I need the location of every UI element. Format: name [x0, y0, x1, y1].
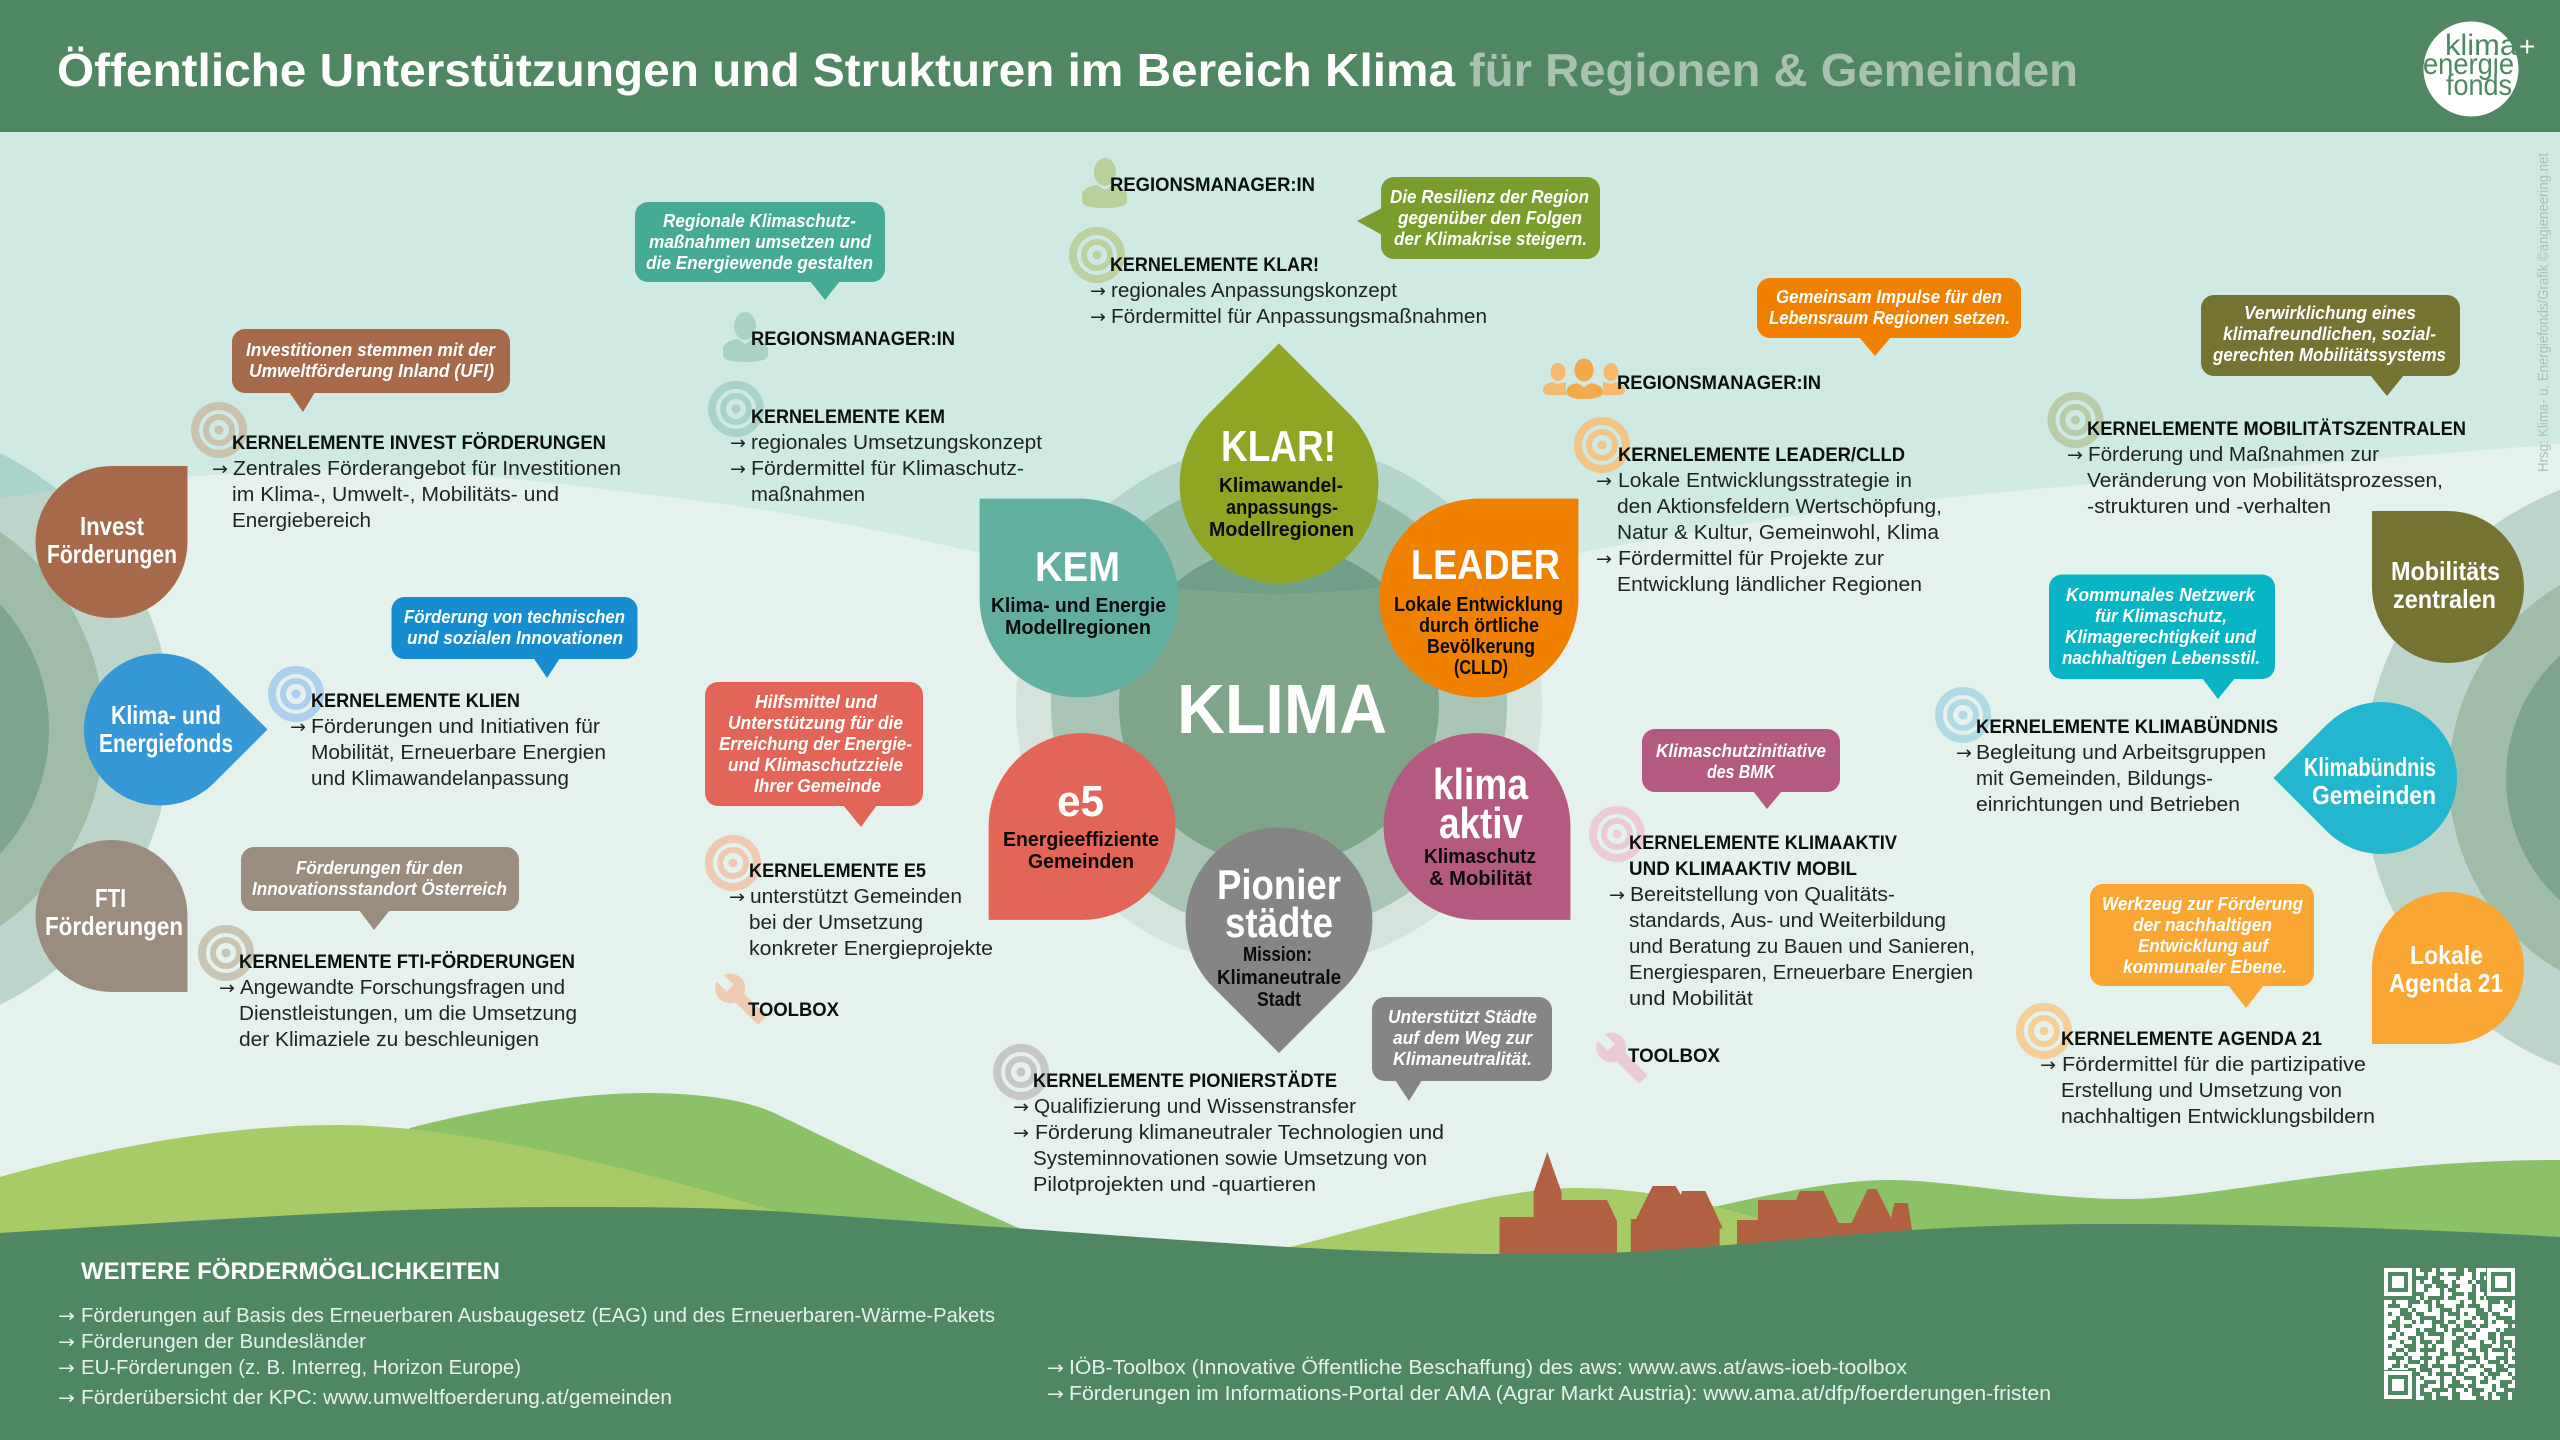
drop: KEM: Klima- und Energie [991, 595, 1166, 617]
block: klimaaktiv: Energiesparen, Erneuerbare Energien [1629, 961, 1973, 984]
callout: LEADER [1757, 278, 2021, 356]
block: KEM: KERNELEMENTE KEM [751, 407, 945, 428]
callout: klimaaktiv: des BMK [1707, 762, 1777, 782]
block: FTI: Angewandte Forschungsfragen und [240, 976, 565, 999]
block: e5 [709, 839, 993, 960]
block: Mobilitätszentralen [2052, 396, 2466, 518]
callout: FTI: Förderungen für den [296, 858, 463, 878]
callout: KLIEN [392, 597, 638, 678]
block: LEADER: → [1596, 549, 1612, 570]
footer list left: Förderungen auf Basis des Erneuerbaren Ausbaugesetz (EAG) und des Erneuerbaren-Wärme-Pakets [81, 1305, 995, 1327]
block: Pionierstädte: Förderung klimaneutraler Technologien und [1035, 1121, 1444, 1144]
block: KEM: REGIONSMANAGER:IN [751, 329, 955, 350]
callout: FTI [241, 847, 519, 930]
subtitle: für Regionen & Gemeinden [1469, 44, 2078, 96]
background: upper teal band [0, 132, 2560, 594]
logo [2423, 22, 2535, 116]
block: KLIEN: → [290, 717, 306, 738]
drop: Lokale Agenda 21 [2372, 892, 2524, 1044]
callout: Agenda 21: kommunaler Ebene. [2123, 957, 2287, 977]
block: Mobilitätszentralen: Förderung und Maßnahmen zur [2088, 443, 2379, 466]
drop: Pionierstädte: Pionier [1217, 861, 1341, 908]
callout: KLIEN: Förderung von technischen [404, 607, 625, 627]
block: FTI: der Klimaziele zu beschleunigen [239, 1028, 539, 1051]
block: Pionierstädte: Qualifizierung und Wissenstransfer [1034, 1095, 1356, 1118]
block: KLIEN: KERNELEMENTE KLIEN [311, 691, 520, 712]
callout: klimaaktiv [1642, 729, 1840, 809]
block: Agenda 21: KERNELEMENTE AGENDA 21 [2061, 1029, 2322, 1050]
drop: klima aktiv: aktiv [1439, 799, 1523, 848]
block: Invest Förderungen: → [212, 459, 228, 480]
callout: e5: Hilfsmittel und [755, 692, 878, 712]
logo: klima [2445, 29, 2517, 62]
callout: Pionierstädte: Unterstützt Städte [1388, 1007, 1537, 1027]
drop: KEM [980, 499, 1178, 697]
block: Pionierstädte [997, 1048, 1444, 1196]
block: Invest Förderungen: Zentrales Förderangebot für Investitionen [233, 457, 621, 480]
landscape hills [0, 1093, 2560, 1260]
drop: FTI Förderungen [36, 840, 187, 992]
block: KLIEN: Förderungen und Initiativen für [311, 715, 600, 738]
block: Pionierstädte: KERNELEMENTE PIONIERSTÄDTE [1033, 1071, 1337, 1092]
drop: klima aktiv [1384, 733, 1570, 920]
village houses [1500, 1152, 1914, 1270]
block: KLAR: → [1090, 281, 1106, 302]
drop: Invest Förderungen: Invest [80, 511, 144, 541]
callout: Klimabündnis: nachhaltigen Lebensstil. [2062, 648, 2260, 668]
block: KLIEN: Mobilität, Erneuerbare Energien [311, 741, 606, 764]
block: Pionierstädte: Systeminnovationen sowie Umsetzung von [1033, 1147, 1427, 1170]
callout: KLAR: gegenüber den Folgen [1397, 208, 1582, 228]
footer list left: → [58, 1388, 75, 1409]
footer list left [58, 1305, 995, 1409]
callout: Pionierstädte [1372, 997, 1552, 1101]
block: LEADER: Lokale Entwicklungsstrategie in [1618, 469, 1912, 492]
drop: e5: Energieeffiziente [1003, 829, 1159, 851]
footer list right: Förderungen im Informations-Portal der AMA (Agrar Markt Austria): www.ama.at/dfp/foerderungen-fristen [1069, 1383, 2051, 1405]
block: e5: konkreter Energieprojekte [749, 937, 993, 960]
drop: LEADER: LEADER [1411, 541, 1560, 588]
drop: Invest Förderungen: Förderungen [47, 539, 177, 569]
logo: fonds [2446, 69, 2512, 102]
block: Klimabündnis: einrichtungen und Betrieben [1976, 793, 2240, 816]
block: LEADER: → [1596, 471, 1612, 492]
block: KLAR: REGIONSMANAGER:IN [1110, 175, 1315, 196]
callout: e5: Ihrer Gemeinde [754, 776, 881, 796]
toolbox klimaaktiv [1596, 1033, 1720, 1083]
drop: e5 [989, 733, 1175, 920]
footer list left: Förderübersicht der KPC: www.umweltfoerderung.at/gemeinden [81, 1387, 672, 1409]
left concentric rings [0, 453, 162, 1005]
callout: Mobilitätszentralen [2201, 295, 2460, 396]
block: KEM: maßnahmen [751, 483, 865, 506]
toolbox klimaaktiv: TOOLBOX [1628, 1046, 1720, 1067]
block: KEM [712, 312, 1042, 506]
callout: KEM: die Energiewende gestalten [646, 253, 873, 273]
block: Agenda 21: Fördermittel für die partizipative [2062, 1053, 2366, 1076]
block: KLAR: regionales Anpassungskonzept [1111, 279, 1397, 302]
icon: regional managers LEADER [1543, 358, 1625, 399]
footer list left: Förderungen der Bundesländer [81, 1331, 366, 1353]
block: KLAR: Fördermittel für Anpassungsmaßnahmen [1111, 305, 1487, 328]
block: KLIEN [272, 670, 606, 790]
block: Klimabündnis [1939, 691, 2278, 816]
callout: KLAR [1357, 177, 1600, 259]
callout: Agenda 21: der nachhaltigen [2133, 915, 2272, 935]
callout: e5 [705, 682, 923, 827]
block: e5: KERNELEMENTE E5 [749, 861, 926, 882]
block: KEM: Fördermittel für Klimaschutz- [751, 457, 1024, 480]
block: Agenda 21: → [2040, 1055, 2056, 1076]
callout: Invest: Umweltförderung Inland (UFI) [249, 361, 494, 381]
callout: KLAR: der Klimakrise steigern. [1394, 229, 1587, 249]
block: Klimabündnis: → [1956, 743, 1972, 764]
drop: Klimabündnis Gemeinden: Gemeinden [2312, 780, 2436, 810]
block: KLAR: → [1090, 307, 1106, 328]
drop: Pionierstädte: städte [1225, 899, 1333, 946]
drop: Pionierstädte: Stadt [1257, 989, 1301, 1011]
callout: Pionierstädte: Klimaneutralität. [1393, 1049, 1532, 1069]
drop: klima aktiv: & Mobilität [1429, 868, 1532, 890]
block: LEADER [1543, 358, 1942, 596]
block: FTI: → [219, 978, 235, 999]
drop: LEADER: Lokale Entwicklung [1394, 594, 1563, 616]
logo: + [2519, 31, 2535, 62]
block: klimaaktiv: KERNELEMENTE KLIMAAKTIV [1629, 833, 1897, 854]
callout: Klimabündnis: Kommunales Netzwerk [2066, 585, 2256, 605]
drop: KLAR [1180, 343, 1378, 583]
block: KEM: → [730, 459, 746, 480]
footer list left: EU-Förderungen (z. B. Interreg, Horizon Europe) [81, 1357, 521, 1379]
block: LEADER: den Aktionsfeldern Wertschöpfung, [1617, 495, 1942, 518]
block: klimaaktiv: UND KLIMAAKTIV MOBIL [1629, 859, 1857, 880]
QR code [2384, 1268, 2518, 1402]
callout: LEADER: Gemeinsam Impulse für den [1776, 287, 2002, 307]
drop: Lokale Agenda 21: Agenda 21 [2389, 968, 2503, 998]
callout: klimaaktiv: Klimaschutzinitiative [1656, 741, 1826, 761]
block: Agenda 21: Erstellung und Umsetzung von [2061, 1079, 2342, 1102]
callout: e5: Erreichung der Energie- [719, 734, 912, 754]
logo: energie [2423, 48, 2514, 81]
block: Mobilitätszentralen: -strukturen und -verhalten [2087, 495, 2331, 518]
callout: Klimabündnis [2049, 574, 2275, 699]
drop: Lokale Agenda 21: Lokale [2410, 940, 2483, 970]
block: Invest Förderungen: KERNELEMENTE INVEST FÖRDERUNGEN [232, 433, 606, 454]
drop: klima aktiv: Klimaschutz [1424, 846, 1536, 868]
credit line: Hrsg: Klima- u. Energiefonds/Grafik ©angieneering.net [2535, 152, 2552, 472]
drop: KLAR: anpassungs- [1226, 497, 1338, 519]
block: Invest Förderungen [195, 406, 621, 532]
drop: e5: e5 [1057, 777, 1104, 826]
drop: KEM: Modellregionen [1005, 617, 1151, 639]
callout: Agenda 21: Entwicklung auf [2138, 936, 2270, 956]
right concentric rings [2363, 469, 2560, 1087]
block: KEM: → [730, 433, 746, 454]
footer list right: → [1047, 1358, 1064, 1379]
callout: KLIEN: und sozialen Innovationen [407, 628, 623, 648]
callout: KLAR: Die Resilienz der Region [1390, 187, 1589, 207]
footer list right: IÖB-Toolbox (Innovative Öffentliche Beschaffung) des aws: www.aws.at/aws-ioeb-toolbox [1069, 1357, 1907, 1379]
callout: Invest: Investitionen stemmen mit der [246, 340, 496, 360]
drop: Invest Förderungen [36, 466, 187, 618]
block: e5: unterstützt Gemeinden [750, 885, 962, 908]
drop: Mobilitätszentralen [2372, 511, 2524, 663]
callout: FTI: Innovationsstandort Österreich [252, 879, 507, 899]
block: Pionierstädte: → [1013, 1123, 1029, 1144]
block: Pionierstädte: Pilotprojekten und -quartieren [1033, 1173, 1316, 1196]
block: Agenda 21 [2020, 1007, 2375, 1128]
block: LEADER: Fördermittel für Projekte zur [1618, 547, 1884, 570]
drop: LEADER [1380, 499, 1578, 697]
block: klimaaktiv: und Beratung zu Bauen und Sanieren, [1629, 935, 1975, 958]
drop: Pionierstädte [1186, 828, 1372, 1053]
block: Agenda 21: nachhaltigen Entwicklungsbildern [2061, 1105, 2375, 1128]
toolbox e5 [715, 974, 839, 1024]
block: KLIEN: und Klimawandelanpassung [311, 767, 569, 790]
block: Mobilitätszentralen: KERNELEMENTE MOBILITÄTSZENTRALEN [2087, 419, 2466, 440]
block: LEADER: KERNELEMENTE LEADER/CLLD [1618, 445, 1905, 466]
callout: KEM: Regionale Klimaschutz- [663, 211, 856, 231]
callout: LEADER: Lebensraum Regionen setzen. [1769, 308, 2010, 328]
callout: Klimabündnis: für Klimaschutz, [2095, 606, 2227, 626]
drop: KEM: KEM [1035, 543, 1120, 590]
callout: Invest [232, 329, 510, 412]
drop: klima aktiv: klima [1433, 760, 1528, 809]
block: klimaaktiv: und Mobilität [1629, 987, 1753, 1010]
central concentric rings [1016, 442, 1542, 968]
callout: KEM: maßnahmen umsetzen und [649, 232, 872, 252]
block: e5: → [729, 887, 745, 908]
block: klimaaktiv [1593, 810, 1975, 1010]
block: e5: bei der Umsetzung [749, 911, 923, 934]
drop: FTI Förderungen: FTI [95, 883, 126, 913]
block: Invest Förderungen: Energiebereich [232, 509, 371, 532]
drop: Pionierstädte: Mission: [1243, 944, 1312, 966]
drop: KLAR: Modellregionen [1209, 519, 1354, 541]
footer list left: → [58, 1332, 75, 1353]
drop: Mobilitätszentralen: Mobilitäts [2391, 556, 2500, 586]
drop: LEADER: (CLLD) [1454, 657, 1508, 679]
block: KEM: regionales Umsetzungskonzept [751, 431, 1042, 454]
drop: Klima- und Energiefonds: Klima- und [111, 700, 221, 730]
callout: Klimabündnis: Klimagerechtigkeit und [2065, 627, 2257, 647]
block: LEADER: Natur & Kultur, Gemeinwohl, Klima [1617, 521, 1940, 544]
centre word KLIMA: KLIMA [1177, 670, 1387, 748]
block: FTI: KERNELEMENTE FTI-FÖRDERUNGEN [239, 952, 575, 973]
footer list right [1047, 1357, 2051, 1405]
block: Klimabündnis: Begleitung und Arbeitsgruppen [1976, 741, 2266, 764]
drop: Klima- und Energiefonds: Energiefonds [99, 728, 233, 758]
block: LEADER: Entwicklung ländlicher Regionen [1617, 573, 1922, 596]
footer heading: WEITERE FÖRDERMÖGLICHKEITEN [81, 1258, 500, 1285]
drop: Klima- und Energiefonds [84, 654, 268, 806]
drop: e5: Gemeinden [1028, 851, 1134, 873]
callout: Mobilitätszentralen: Verwirklichung eines [2244, 303, 2416, 323]
block: Mobilitätszentralen: → [2067, 445, 2083, 466]
title: Öffentliche Unterstützungen und Strukturen im Bereich Klima [57, 44, 1455, 96]
footer list right: → [1047, 1384, 1064, 1405]
footer list left: → [58, 1306, 75, 1327]
callout: KEM [635, 202, 885, 300]
drop: LEADER: durch örtliche [1419, 615, 1539, 637]
icon: regional manager KLAR [1082, 158, 1127, 208]
drop: Klimabündnis Gemeinden: Klimabündnis [2304, 752, 2436, 782]
block: KLAR [1073, 158, 1487, 328]
callout: Agenda 21: Werkzeug zur Förderung [2102, 894, 2303, 914]
block: KLAR: KERNELEMENTE KLAR! [1110, 255, 1319, 276]
drop: KLAR: Klimawandel- [1219, 475, 1343, 497]
drop: LEADER: Bevölkerung [1427, 636, 1535, 658]
block: Klimabündnis: mit Gemeinden, Bildungs- [1976, 767, 2213, 790]
block: Mobilitätszentralen: Veränderung von Mobilitätsprozessen, [2087, 469, 2443, 492]
drop: FTI Förderungen: Förderungen [45, 911, 183, 941]
callout: e5: und Klimaschutzziele [728, 755, 903, 775]
drop: Mobilitätszentralen: zentralen [2393, 584, 2496, 614]
block: Pionierstädte: → [1013, 1097, 1029, 1118]
callout: Mobilitätszentralen: gerechten Mobilitätssystems [2212, 345, 2446, 365]
icon: regional manager KEM [723, 312, 768, 362]
block: Invest Förderungen: im Klima-, Umwelt-, Mobilitäts- und [232, 483, 559, 506]
callout: e5: Unterstützung für die [728, 713, 903, 733]
block: Klimabündnis: KERNELEMENTE KLIMABÜNDNIS [1976, 717, 2278, 738]
block: FTI: Dienstleistungen, um die Umsetzung [239, 1002, 577, 1025]
block: klimaaktiv: Bereitstellung von Qualitäts- [1630, 883, 1895, 906]
block: klimaaktiv: → [1609, 885, 1625, 906]
block: FTI [202, 929, 577, 1051]
drop: Klimabündnis Gemeinden [2274, 702, 2457, 854]
callout: Agenda 21 [2090, 884, 2314, 1008]
footer list left: → [58, 1358, 75, 1379]
callout: Mobilitätszentralen: klimafreundlichen, sozial- [2223, 324, 2436, 344]
footer panel [0, 1207, 2560, 1440]
callout: Pionierstädte: auf dem Weg zur [1393, 1028, 1533, 1048]
block: LEADER: REGIONSMANAGER:IN [1617, 373, 1821, 394]
drop: KLAR: KLAR! [1221, 422, 1336, 471]
toolbox e5: TOOLBOX [748, 1000, 839, 1021]
header bar [0, 0, 2560, 132]
block: klimaaktiv: standards, Aus- und Weiterbildung [1629, 909, 1946, 932]
drop: Pionierstädte: Klimaneutrale [1217, 967, 1341, 989]
